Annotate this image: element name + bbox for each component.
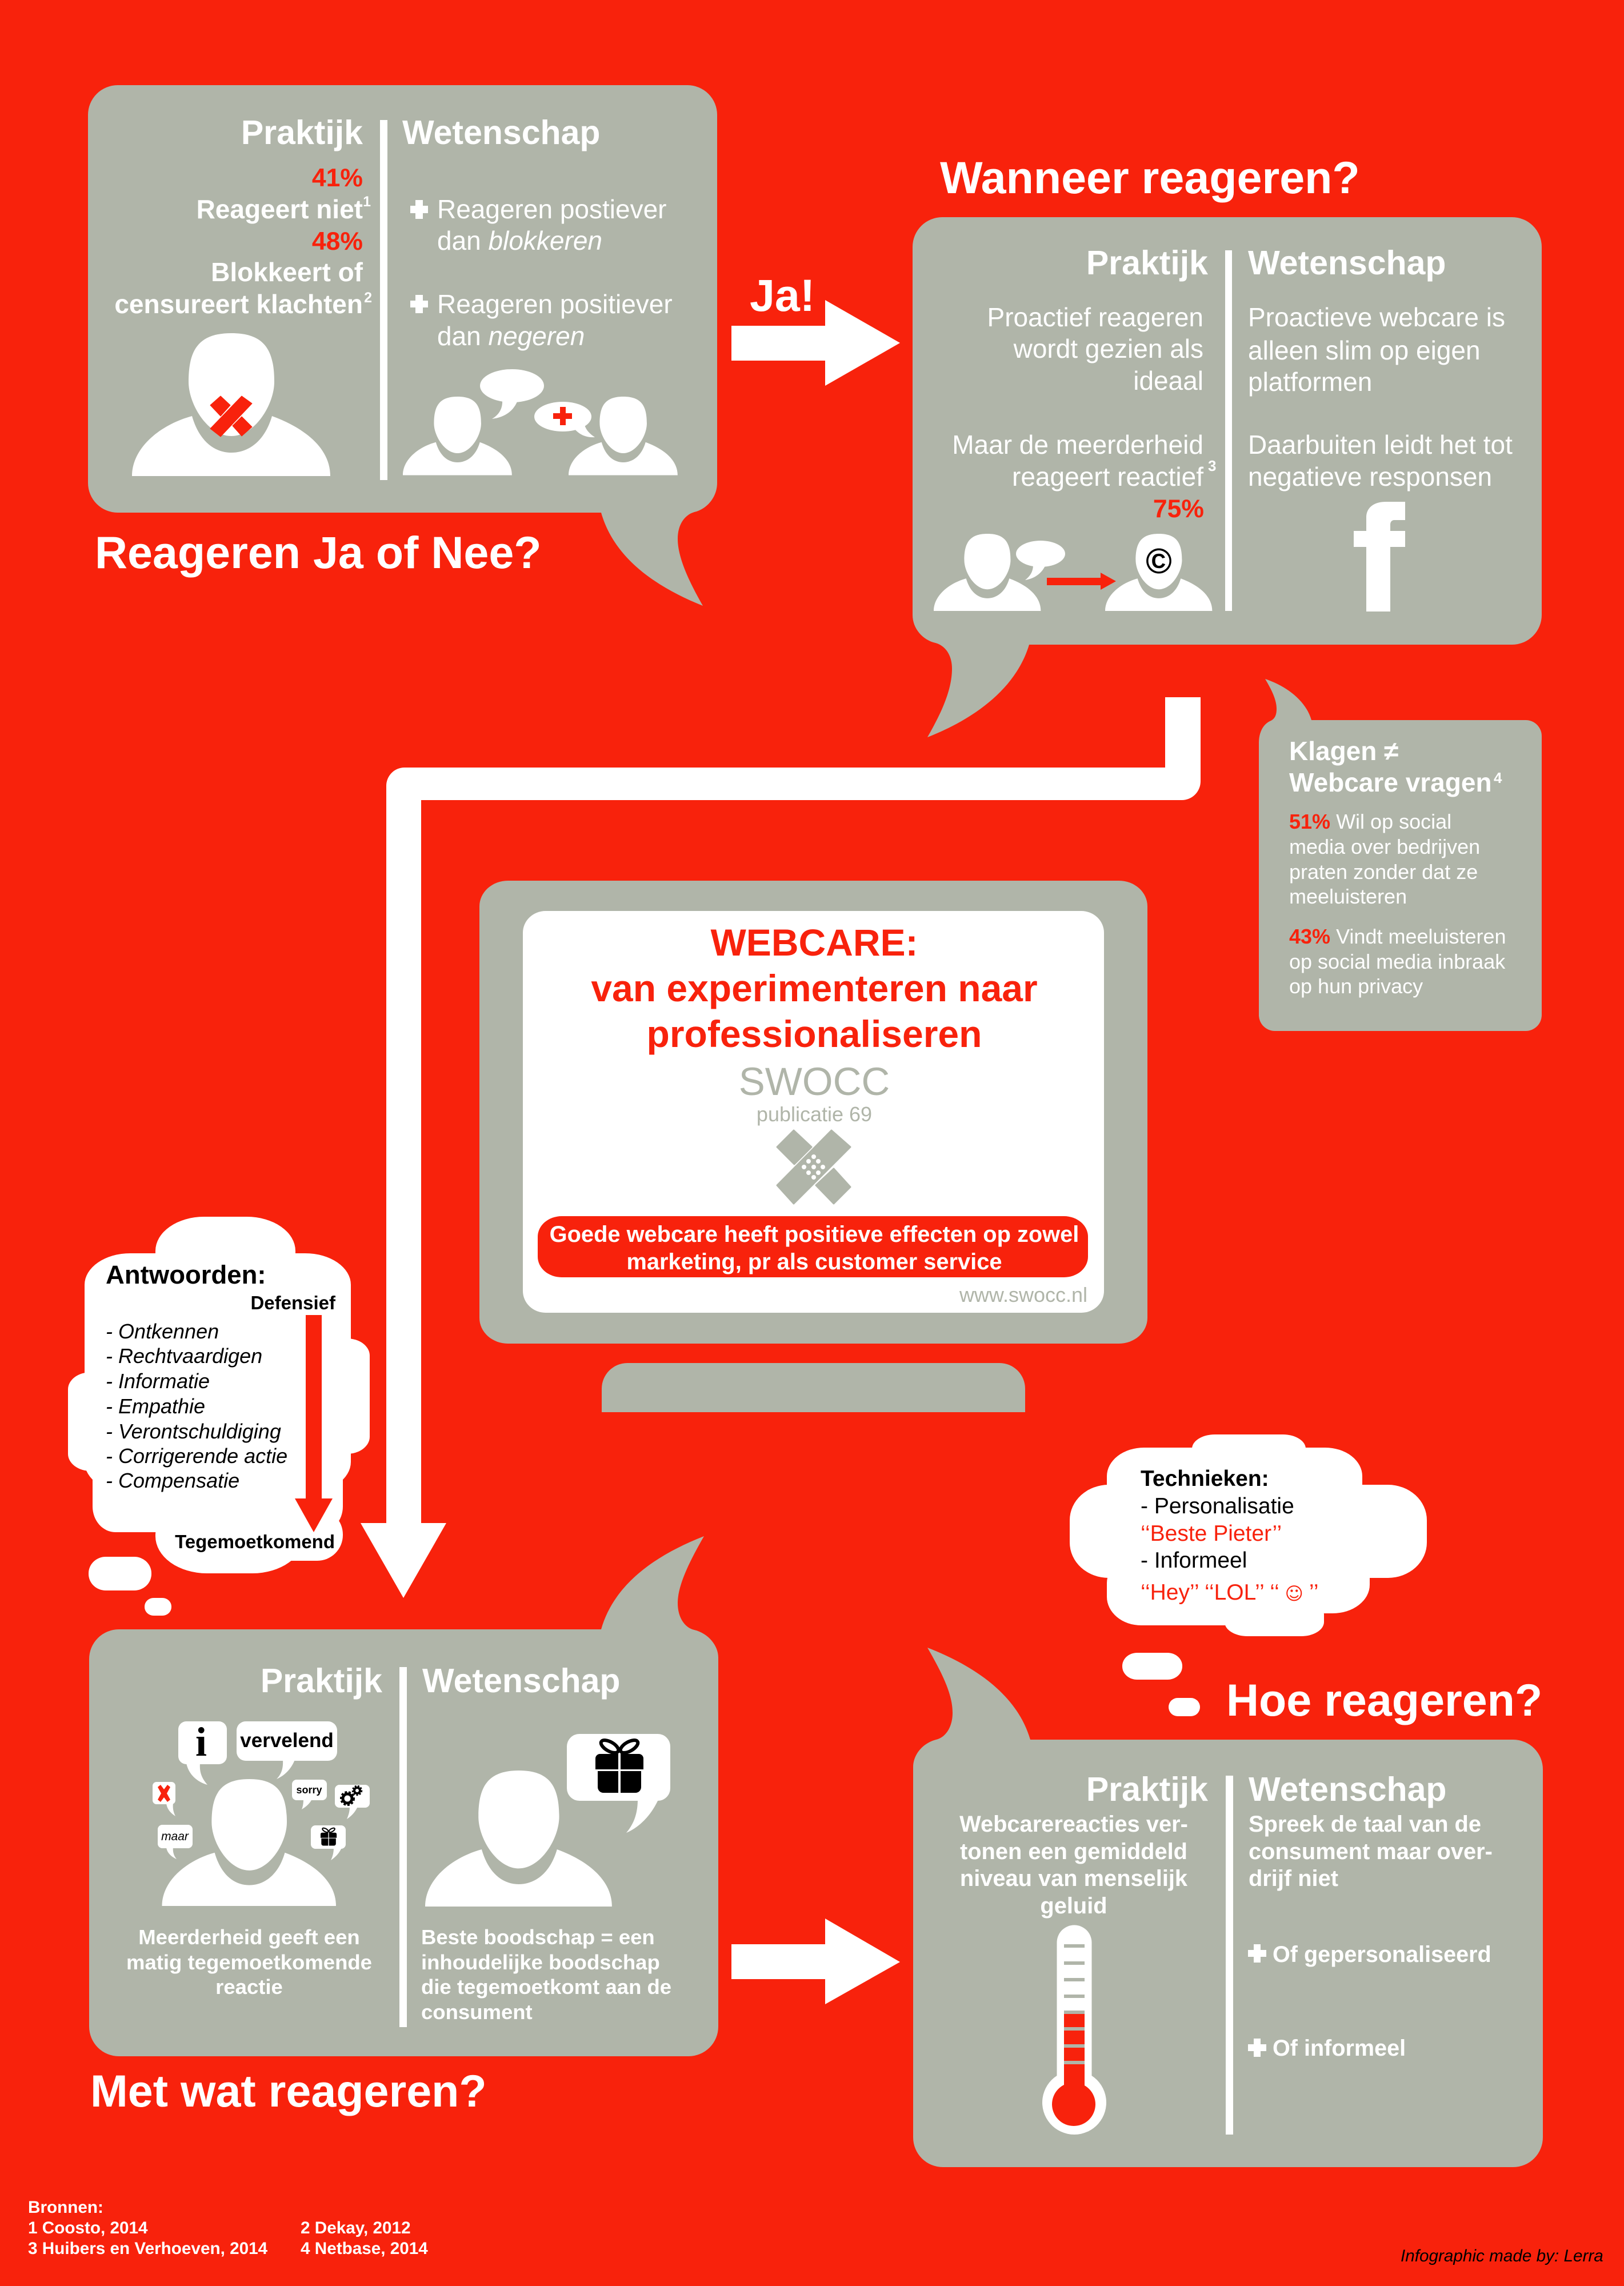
text: praktijk: Meerderheid geeft een (138, 1925, 360, 1949)
column divider (1226, 1776, 1233, 2135)
text: technieken: Technieken: (1141, 1466, 1269, 1491)
text: technieken: - Personalisatie (1141, 1494, 1294, 1518)
panel: wanneer reageren (913, 217, 1542, 737)
bubble: maar: maar (161, 1830, 189, 1843)
text: wetenschap: consument (421, 2000, 533, 2024)
bubble: gears (335, 1785, 370, 1819)
heading: wetenschap: Wetenschap (402, 114, 600, 151)
bubble: vervelend (237, 1721, 337, 1779)
text: wetenschap: alleen slim op eigen (1248, 335, 1481, 365)
text: praktijk: tonen een gemiddeld (960, 1839, 1187, 1864)
statistics: praktijk: 1 (363, 194, 371, 210)
panel: hoe reageren (913, 1648, 1543, 2167)
text: praktijk: Maar de meerderheid (952, 430, 1203, 459)
sources: 2 Dekay, 2012 (301, 2219, 411, 2237)
list: response types: - Verontschuldiging (106, 1420, 281, 1443)
heading: klagen: Webcare vragen (1289, 768, 1492, 797)
statistics: praktijk: 2 (364, 290, 372, 306)
heading: klagen (1289, 736, 1502, 797)
panel background speech bubble (89, 1536, 718, 2056)
title: hoe reageren: Hoe reageren? (1226, 1674, 1542, 1725)
text: praktijk: reactie (215, 1975, 283, 1999)
text: wetenschap: Proactieve webcare is (1248, 302, 1505, 332)
main title: van experimenteren naar (591, 967, 1038, 1009)
icon: person speaking to brand (934, 534, 1212, 611)
panel background speech bubble (913, 217, 1542, 737)
text: wetenschap: consument maar over- (1249, 1839, 1493, 1864)
label: ja: Ja! (750, 270, 815, 321)
text: wetenschap (421, 1925, 671, 2024)
text: wetenschap: inhoudelijke boodschap (421, 1951, 660, 1974)
panel background speech bubble (88, 85, 717, 606)
list: response types: - Corrigerende actie (106, 1444, 287, 1468)
text: praktijk: Webcarereacties ver- (959, 1812, 1188, 1837)
icon: bandage cross (777, 1130, 850, 1204)
heading: wetenschap: Wetenschap (1248, 244, 1446, 282)
banner: goede webcare (538, 1216, 1088, 1277)
sources (28, 2198, 428, 2258)
heading: wetenschap: Wetenschap (1249, 1771, 1446, 1808)
sources: 3 Huibers en Verhoeven, 2014 (28, 2239, 268, 2258)
bubble: sorry: sorry (296, 1784, 322, 1796)
arrow: to hoe reageren (731, 1919, 900, 2004)
text: wetenschap claims: Reageren postiever (437, 194, 666, 224)
text: wetenschap: drijf niet (1249, 1866, 1338, 1891)
panel: klagen is geen webcare vragen (1259, 679, 1542, 1031)
thought cloud: technieken (1070, 1434, 1427, 1716)
text: 51 percent (1289, 810, 1480, 908)
list: response types: - Ontkennen (106, 1320, 219, 1343)
list: response types: - Compensatie (106, 1469, 239, 1492)
cloud shape (1070, 1434, 1427, 1716)
bubble: maar (158, 1825, 193, 1859)
logo text: swocc: SWOCC (739, 1060, 890, 1104)
text: 43 percent: 43% Vindt meeluisteren (1289, 925, 1506, 948)
text: wetenschap: platformen (1248, 367, 1372, 397)
text: publicatie: publicatie 69 (757, 1102, 872, 1126)
panel background speech bubble (1259, 679, 1542, 1031)
text: wetenschap: die tegemoetkomt aan de (421, 1975, 671, 1999)
text: praktijk (126, 1925, 372, 1999)
bubble: sorry (292, 1780, 327, 1809)
text: technieken: ‘‘Hey’’ ‘‘LOL’’ ‘‘ ☺ ’’ (1141, 1580, 1318, 1605)
text: praktijk: matig tegemoetkomende (126, 1951, 372, 1974)
heading: wetenschap: Wetenschap (422, 1662, 620, 1700)
text: praktijk (952, 302, 1216, 523)
panel background speech bubble (913, 1648, 1543, 2167)
text: technieken (1141, 1466, 1318, 1605)
list: response types (106, 1320, 287, 1492)
text: praktijk: Proactief reageren (987, 302, 1203, 332)
text: praktijk: wordt gezien als (1013, 334, 1203, 363)
arrow: red scale (295, 1315, 333, 1532)
banner: goede webcare: Goede webcare heeft positieve effecten op zowel (550, 1222, 1079, 1247)
bubble: small gift (311, 1825, 346, 1860)
sources: 1 Coosto, 2014 (28, 2219, 148, 2237)
column divider (380, 120, 387, 480)
icon: person with many speech bubbles (153, 1719, 370, 1906)
text: 51 percent: media over bedrijven (1289, 835, 1480, 858)
text: praktijk: reageert reactief (1012, 462, 1203, 491)
statistics: praktijk: 48% (312, 227, 363, 255)
bubble: cross (153, 1782, 175, 1816)
text: wetenschap (1248, 302, 1513, 491)
statistics: praktijk: 41% (312, 164, 363, 192)
statistics: praktijk: Reageert niet (197, 194, 363, 224)
text: wetenschap: negatieve responsen (1248, 462, 1492, 491)
panel: reageren ja of nee (88, 85, 717, 606)
text: praktijk: ideaal (1133, 366, 1203, 395)
monitor screen (523, 911, 1104, 1313)
text: praktijk (959, 1812, 1188, 1919)
list: response types: - Empathie (106, 1394, 205, 1418)
label: tegemoetkomend: Tegemoetkomend (175, 1531, 335, 1552)
bubble: information: i (195, 1719, 207, 1765)
title: met wat reageren: Met wat reageren? (90, 2065, 487, 2116)
main title: WEBCARE: (711, 921, 918, 964)
monitor: central title (479, 881, 1147, 1412)
title: wanneer reageren: Wanneer reageren? (940, 152, 1360, 203)
main title: professionaliseren (647, 1013, 982, 1055)
heading: antwoorden: Antwoorden: (106, 1260, 266, 1289)
statistics: praktijk: Blokkeert of (211, 257, 363, 287)
list: response types: - Informatie (106, 1369, 210, 1393)
column divider (399, 1667, 407, 2027)
main title (591, 921, 1038, 1055)
text: 51 percent: meeluisteren (1289, 885, 1407, 908)
item: of gepersonaliseerd: Of gepersonaliseerd (1273, 1942, 1491, 1967)
heading: praktijk: Praktijk (261, 1662, 382, 1700)
text: praktijk: 3 (1208, 457, 1216, 474)
text: wetenschap claims (410, 194, 673, 351)
credit: Infographic made by: Lerra (1401, 2247, 1603, 2265)
text: 51 percent: praten zonder dat ze (1289, 860, 1478, 884)
text: wetenschap (1249, 1812, 1493, 1891)
panel: met wat reageren (89, 1536, 718, 2056)
icon: facebook f (1354, 502, 1405, 612)
bubble: vervelend: vervelend (240, 1729, 334, 1752)
text: wetenschap: Spreek de taal van de (1249, 1812, 1481, 1837)
text: technieken: ‘‘Beste Pieter’’ (1141, 1521, 1282, 1546)
text: wetenschap claims: dan negeren (437, 321, 585, 351)
icon: person speaking to brand: © (1146, 542, 1172, 581)
icon: thermometer (1042, 1925, 1106, 2135)
text: wetenschap: Daarbuiten leidt het tot (1248, 430, 1513, 459)
title: reageren ja of nee: Reageren Ja of Nee? (95, 527, 542, 578)
heading: praktijk: Praktijk (1086, 244, 1208, 282)
heading: klagen: 4 (1494, 769, 1502, 786)
text: wetenschap claims: dan blokkeren (437, 226, 602, 255)
heading: praktijk: Praktijk (241, 114, 363, 151)
text: 43 percent (1289, 925, 1506, 998)
text: 43 percent: op hun privacy (1289, 974, 1423, 998)
text: 51 percent: 51% Wil op social (1289, 810, 1451, 833)
text: wetenschap claims: Reageren positiever (437, 289, 673, 319)
icon: two people talking (403, 369, 678, 475)
statistics: praktijk (114, 164, 372, 319)
text: praktijk: 75% (1153, 495, 1204, 523)
url: www.swocc.nl (959, 1283, 1087, 1306)
text: praktijk: geluid (1040, 1893, 1107, 1919)
arrow: to wanneer reageren (731, 300, 900, 386)
column divider (1225, 250, 1232, 611)
list: response types: - Rechtvaardigen (106, 1344, 262, 1368)
monitor frame (479, 881, 1147, 1344)
sources: Bronnen: (28, 2198, 103, 2217)
monitor stand (602, 1363, 1025, 1412)
cloud shape (68, 1217, 370, 1616)
icon: person with gift speech bubble (425, 1734, 670, 1907)
icon: person with taped mouth (132, 333, 330, 476)
label: defensief: Defensief (250, 1292, 336, 1313)
text: wetenschap: Beste boodschap = een (421, 1925, 655, 1949)
connector arrow: white path from wanneer to met wat (361, 697, 1201, 1598)
statistics: praktijk: censureert klachten (114, 289, 363, 319)
sources: 4 Netbase, 2014 (301, 2239, 428, 2258)
heading: klagen: Klagen ≠ (1289, 736, 1398, 766)
text: 43 percent: op social media inbraak (1289, 950, 1506, 973)
heading: praktijk: Praktijk (1086, 1771, 1208, 1808)
bubble: information (178, 1719, 227, 1785)
text: praktijk: niveau van menselijk (960, 1866, 1188, 1891)
banner: goede webcare: marketing, pr als customer service (627, 1249, 1002, 1274)
text: technieken: - Informeel (1141, 1548, 1247, 1573)
thought cloud: antwoorden (68, 1217, 370, 1616)
item: of informeel: Of informeel (1273, 2036, 1406, 2061)
